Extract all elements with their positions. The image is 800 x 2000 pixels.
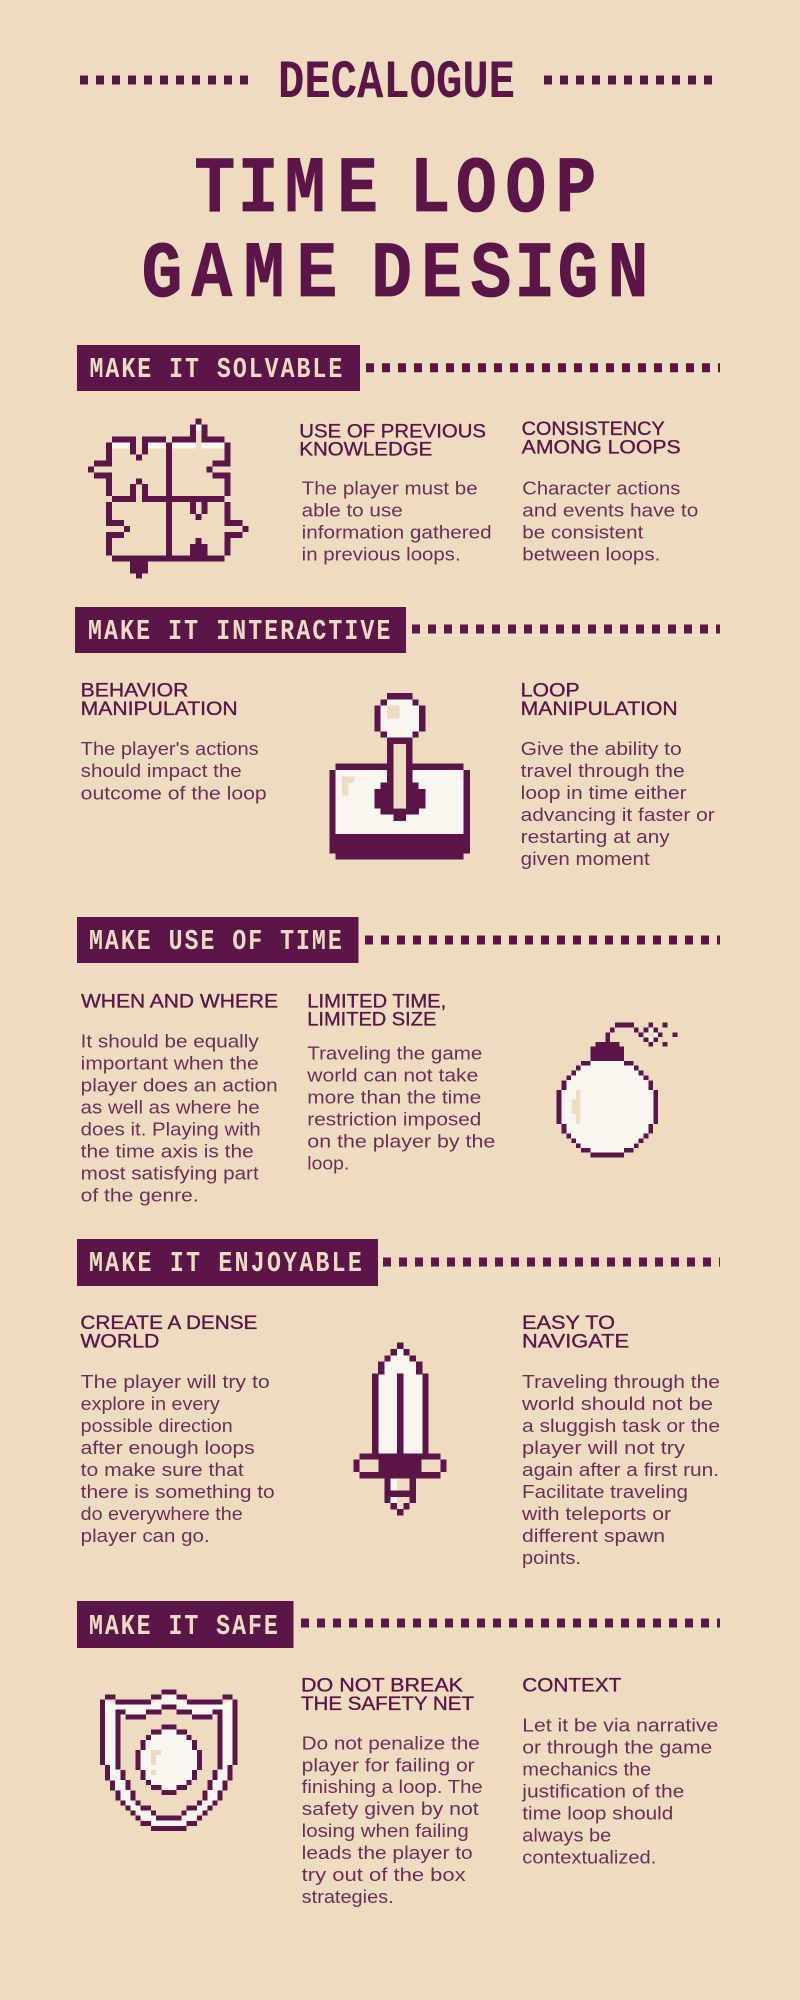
text block: create a dense world: do everywhere the: [81, 1504, 243, 1524]
text block: consistency among loops: CONSISTENCY: [522, 419, 665, 440]
text block: use of previous knowledge: able to use: [302, 500, 403, 520]
text block: context: [521, 1676, 718, 1868]
section banner: make it interactive: MAKE IT INTERACTIVE: [88, 615, 390, 648]
text block: easy to navigate: points.: [522, 1548, 581, 1568]
panel: make it solvable: [77, 345, 720, 579]
text block: loop manipulation: loop in time either: [521, 783, 687, 803]
text block: context: Let it be via narrative: [522, 1716, 718, 1736]
text block: consistency among loops: and events have to: [522, 500, 698, 520]
text block: do not break the safety net: player for failing or: [302, 1755, 475, 1775]
text block: easy to navigate: again after a first run.: [522, 1460, 719, 1480]
text block: limited time, limited size: LIMITED SIZE: [307, 1010, 436, 1031]
section banner: make it interactive: [75, 607, 720, 653]
text block: context: justification of the: [521, 1782, 684, 1802]
text block: when and where: as well as where he: [81, 1098, 260, 1118]
text block: loop manipulation: MANIPULATION: [521, 699, 678, 720]
section banner: make it safe: MAKE IT SAFE: [89, 1610, 278, 1643]
text block: easy to navigate: player will not try: [522, 1438, 685, 1458]
text block: loop manipulation: LOOP: [521, 681, 580, 702]
text block: easy to navigate: NAVIGATE: [522, 1332, 629, 1352]
text block: behavior manipulation: BEHAVIOR: [81, 681, 188, 702]
title: GAME DESIGN: [142, 230, 648, 321]
section banner: make it solvable: MAKE IT SOLVABLE: [90, 353, 342, 386]
text block: when and where: WHEN AND WHERE: [81, 992, 278, 1013]
section banner: make it safe: [77, 1601, 720, 1648]
text block: limited time, limited size: Traveling the game: [307, 1043, 482, 1063]
text block: create a dense world: possible direction: [81, 1416, 233, 1436]
text block: consistency among loops: between loops.: [522, 544, 660, 564]
text block: do not break the safety net: leads the player to: [302, 1843, 473, 1863]
text block: limited time, limited size: LIMITED TIME,: [307, 992, 446, 1013]
text block: do not break the safety net: THE SAFETY NET: [301, 1694, 474, 1715]
text block: when and where: of the genre.: [81, 1186, 199, 1206]
text block: when and where: the time axis is the: [81, 1142, 254, 1162]
text block: create a dense world: [80, 1313, 275, 1546]
text block: behavior manipulation: The player's actions: [81, 739, 259, 759]
text block: loop manipulation: restarting at any: [521, 827, 670, 847]
text block: do not break the safety net: losing when failing: [302, 1821, 469, 1841]
text block: limited time, limited size: restriction imposed: [307, 1109, 481, 1129]
section banner: make it enjoyable: MAKE IT ENJOYABLE: [89, 1247, 362, 1280]
text block: when and where: does it. Playing with: [81, 1120, 261, 1140]
text block: do not break the safety net: DO NOT BREAK: [301, 1676, 463, 1697]
text block: consistency among loops: be consistent: [522, 522, 643, 542]
text block: create a dense world: to make sure that: [81, 1460, 244, 1480]
title: TIME LOOP: [194, 145, 596, 236]
section banner: make use of time: MAKE USE OF TIME: [89, 925, 342, 958]
text block: limited time, limited size: world can not take: [306, 1065, 478, 1085]
text block: when and where: [81, 992, 278, 1206]
panel: make it enjoyable: [77, 1239, 720, 1568]
text block: use of previous knowledge: USE OF PREVIOUS: [299, 422, 486, 443]
text block: limited time, limited size: on the player by the: [307, 1131, 495, 1151]
icon: bomb: [557, 1023, 677, 1157]
icon: shield: [100, 1689, 238, 1831]
text block: when and where: It should be equally: [81, 1032, 259, 1052]
text block: do not break the safety net: Do not penalize the: [302, 1733, 480, 1753]
text block: do not break the safety net: try out of the box: [302, 1865, 466, 1885]
panel: make use of time: [77, 917, 720, 1206]
text block: easy to navigate: a sluggish task or the: [522, 1416, 720, 1436]
text block: loop manipulation: given moment: [521, 849, 650, 869]
text block: when and where: important when the: [81, 1054, 259, 1074]
section banner: make use of time: [77, 917, 720, 963]
text block: consistency among loops: Character actions: [522, 478, 680, 498]
text block: easy to navigate: world should not be: [521, 1394, 713, 1414]
header: decalogue with dotted rules: DECALOGUE: [278, 53, 515, 114]
text block: use of previous knowledge: KNOWLEDGE: [299, 440, 432, 461]
text block: loop manipulation: travel through the: [521, 761, 685, 781]
text block: use of previous knowledge: [299, 422, 492, 564]
text block: context: contextualized.: [522, 1848, 656, 1868]
text block: limited time, limited size: more than the time: [307, 1087, 481, 1107]
icon: joystick: [329, 693, 470, 860]
panel: make it safe: [77, 1601, 720, 1907]
text block: easy to navigate: different spawn: [522, 1526, 665, 1546]
text block: do not break the safety net: finishing a loop. The: [302, 1777, 483, 1797]
text block: when and where: most satisfying part: [81, 1164, 259, 1184]
text block: use of previous knowledge: information gathered: [302, 522, 492, 542]
text block: when and where: player does an action: [81, 1076, 278, 1096]
text block: consistency among loops: [522, 419, 698, 564]
icon: puzzle: [88, 419, 249, 579]
text block: do not break the safety net: [301, 1676, 483, 1907]
text block: behavior manipulation: outcome of the loop: [81, 783, 267, 803]
text block: do not break the safety net: safety given by not: [302, 1799, 479, 1819]
text block: create a dense world: CREATE A DENSE: [80, 1313, 257, 1334]
text block: context: or through the game: [522, 1738, 712, 1758]
section banner: make it solvable: [77, 345, 720, 391]
text block: create a dense world: The player will try to: [81, 1372, 270, 1392]
text block: easy to navigate: Facilitate traveling: [522, 1482, 688, 1502]
text block: create a dense world: explore in every: [81, 1394, 220, 1414]
text block: behavior manipulation: MANIPULATION: [81, 699, 238, 720]
title: [142, 145, 648, 321]
text block: context: CONTEXT: [522, 1676, 622, 1697]
text block: easy to navigate: Traveling through the: [522, 1372, 720, 1392]
text block: easy to navigate: with teleports or: [521, 1504, 671, 1524]
section banner: make it enjoyable: [77, 1239, 720, 1286]
text block: context: always be: [522, 1826, 611, 1846]
text block: use of previous knowledge: in previous loops.: [302, 544, 461, 564]
text block: behavior manipulation: [81, 681, 267, 803]
text block: easy to navigate: [521, 1313, 720, 1568]
text block: limited time, limited size: loop.: [307, 1153, 349, 1173]
text block: loop manipulation: [521, 681, 715, 869]
text block: create a dense world: WORLD: [80, 1332, 159, 1352]
text block: do not break the safety net: strategies.: [302, 1887, 394, 1907]
text block: context: mechanics the: [522, 1760, 651, 1780]
text block: easy to navigate: EASY TO: [522, 1313, 615, 1334]
text block: loop manipulation: Give the ability to: [521, 739, 682, 759]
text block: create a dense world: there is something to: [81, 1482, 275, 1502]
text block: create a dense world: player can go.: [81, 1526, 210, 1546]
text block: loop manipulation: advancing it faster or: [521, 805, 715, 825]
text block: behavior manipulation: should impact the: [81, 761, 242, 781]
text block: use of previous knowledge: The player must be: [302, 478, 478, 498]
text block: context: time loop should: [522, 1804, 673, 1824]
text block: limited time, limited size: [306, 992, 495, 1173]
panel: make it interactive: [75, 607, 720, 869]
text block: create a dense world: after enough loops: [81, 1438, 255, 1458]
text block: consistency among loops: AMONG LOOPS: [522, 437, 681, 458]
icon: sword: [353, 1343, 447, 1515]
